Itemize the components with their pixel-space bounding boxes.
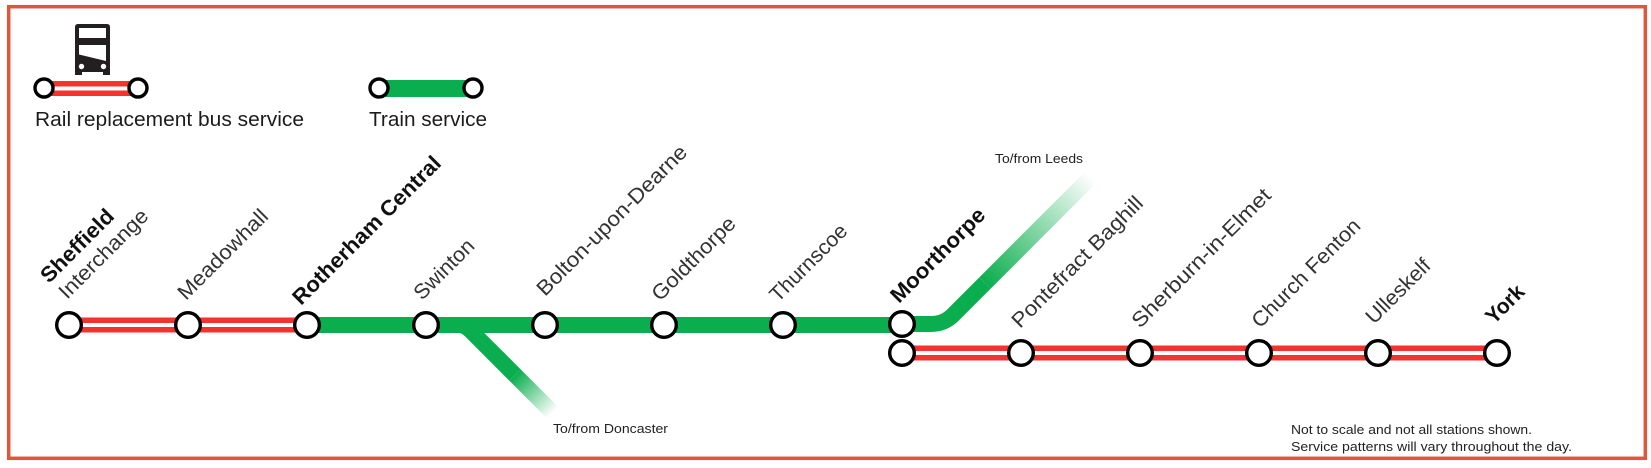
label: Goldthorpe: Goldthorpe	[647, 212, 741, 306]
legend label: train: Train service	[369, 109, 487, 131]
footnote: Not to scale and not all stations shown.	[1291, 422, 1532, 437]
legend label: bus: Rail replacement bus service	[35, 109, 304, 131]
rail replacement section: Moorthorpe to York	[902, 346, 1497, 360]
legend: rail replacement bus service	[35, 24, 304, 131]
legend train line sample	[370, 79, 482, 97]
label: Meadowhall: Meadowhall	[173, 205, 273, 305]
branch label: Leeds: To/from Leeds	[995, 151, 1084, 166]
legend: train service	[369, 79, 487, 131]
train line: Rotherham to Moorthorpe	[307, 317, 902, 333]
label: Church Fenton: Church Fenton	[1247, 214, 1365, 333]
label: Bolton-upon-Dearne: Bolton-upon-Dearne	[532, 141, 692, 301]
label: Rotherham Central: Rotherham Central	[288, 151, 446, 310]
rail replacement section: Sheffield to Rotherham	[69, 318, 307, 332]
station markers	[57, 312, 1509, 365]
branch label: Doncaster: To/from Doncaster	[553, 421, 669, 436]
label: Moorthorpe: Moorthorpe	[886, 203, 990, 308]
train branch: to/from Doncaster	[450, 325, 553, 413]
footnote: Service patterns will vary throughout the day.	[1291, 439, 1572, 454]
train branch: to/from Leeds	[902, 177, 1091, 324]
label: Sherburn-in-Elmet: Sherburn-in-Elmet	[1127, 184, 1276, 333]
label: Interchange: Interchange	[54, 205, 153, 304]
icon: double-decker bus	[75, 24, 110, 75]
label: Thurnscoe: Thurnscoe	[765, 220, 852, 307]
label: York: York	[1481, 280, 1529, 329]
label: Pontefract Baghill: Pontefract Baghill	[1007, 192, 1148, 333]
label: Swinton: Swinton	[409, 235, 479, 305]
label: Sheffield: Sheffield	[36, 204, 119, 288]
footnote	[1291, 422, 1572, 454]
label: Ulleskelf: Ulleskelf	[1361, 254, 1436, 329]
legend bus line sample	[35, 79, 147, 97]
station labels	[36, 141, 1529, 333]
